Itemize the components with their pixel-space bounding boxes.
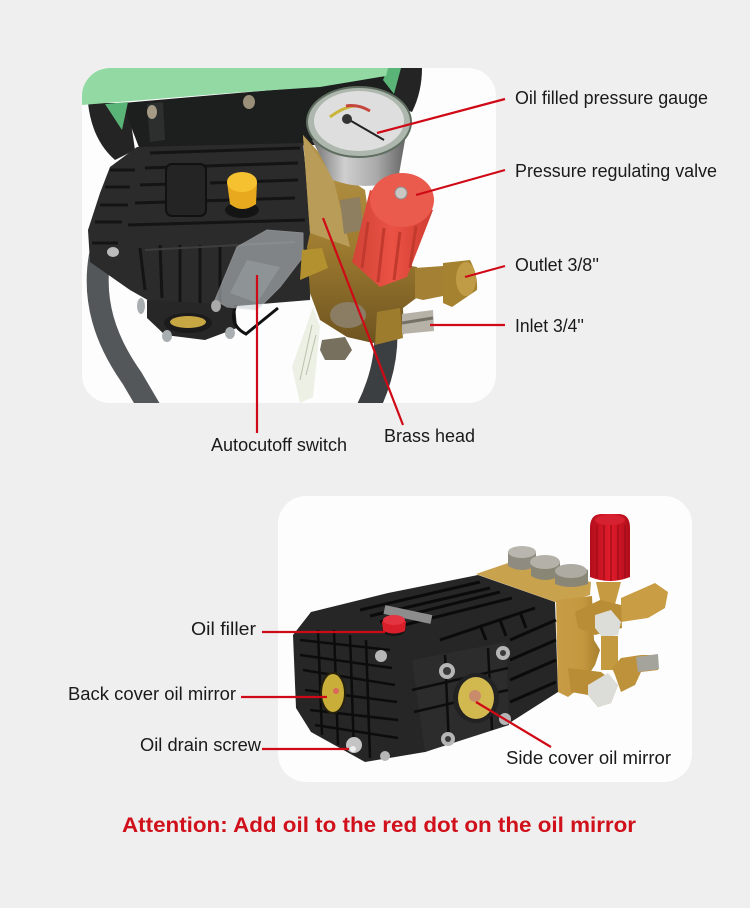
icon: hex plugs <box>330 302 366 328</box>
arrow: side mirror leader <box>476 702 551 747</box>
icon: oil drain screw <box>346 737 362 753</box>
arrow: brass head leader <box>323 218 403 425</box>
icon: red knob <box>590 514 630 581</box>
icon: inlet fitting <box>375 308 403 345</box>
icon: outlet fitting <box>415 266 443 300</box>
icon: yellow oil cap <box>225 172 259 218</box>
arrow: gauge leader <box>377 99 505 133</box>
icon: side fittings <box>596 582 621 608</box>
label: gauge: Oil filled pressure gauge <box>515 88 708 108</box>
icon: side oil mirror <box>453 673 499 723</box>
label: autocutoff: Autocutoff switch <box>211 435 347 455</box>
panel: bottom pump photo <box>278 496 692 782</box>
icon: brass head <box>303 135 477 360</box>
icon: wheels <box>88 68 422 160</box>
icon: pressure gauge <box>307 87 411 186</box>
icon: black pump block <box>293 575 558 762</box>
icon: oil filler cap <box>382 622 406 636</box>
icon: back oil mirror <box>321 673 345 713</box>
arrow: drain leader <box>262 748 349 750</box>
label: back cover oil mirror: Back cover oil mirror <box>68 684 236 704</box>
arrow: switch leader <box>256 275 258 433</box>
icon: autocutoff switch <box>211 230 328 312</box>
arrow: back mirror leader <box>241 696 327 698</box>
icon: machine body behind pump <box>128 76 390 147</box>
arrow: outlet leader <box>465 266 505 277</box>
icon: brass pump head <box>476 514 668 707</box>
arrow: filler leader <box>262 631 385 633</box>
icon: black pump block <box>88 143 312 308</box>
icon: rear cover with oil mirror <box>137 298 237 342</box>
icon: black cable <box>234 305 278 334</box>
icon: green hood <box>82 68 401 130</box>
label: brass head: Brass head <box>384 426 475 446</box>
label: oil filler: Oil filler <box>191 619 256 639</box>
label: side cover oil mirror: Side cover oil mirror <box>506 748 671 768</box>
arrow: inlet leader <box>430 324 505 326</box>
callout: attention: Attention: Add oil to the red dot on the oil mirror <box>122 814 636 837</box>
icon: back cover grid <box>300 630 398 758</box>
label: valve: Pressure regulating valve <box>515 161 717 181</box>
icon: bolts <box>375 646 511 761</box>
label: outlet: Outlet 3/8'' <box>515 255 599 275</box>
icon: frame tubes <box>98 255 386 412</box>
icon: red pressure valve knob <box>352 173 434 287</box>
label: oil drain screw: Oil drain screw <box>140 735 262 755</box>
infographic canvas <box>70 68 716 832</box>
icon: top plugs <box>508 546 588 587</box>
label: inlet: Inlet 3/4'' <box>515 316 584 336</box>
panel: top pump photo <box>82 68 496 412</box>
icon: tag <box>292 307 320 403</box>
arrow: valve leader <box>416 170 505 195</box>
